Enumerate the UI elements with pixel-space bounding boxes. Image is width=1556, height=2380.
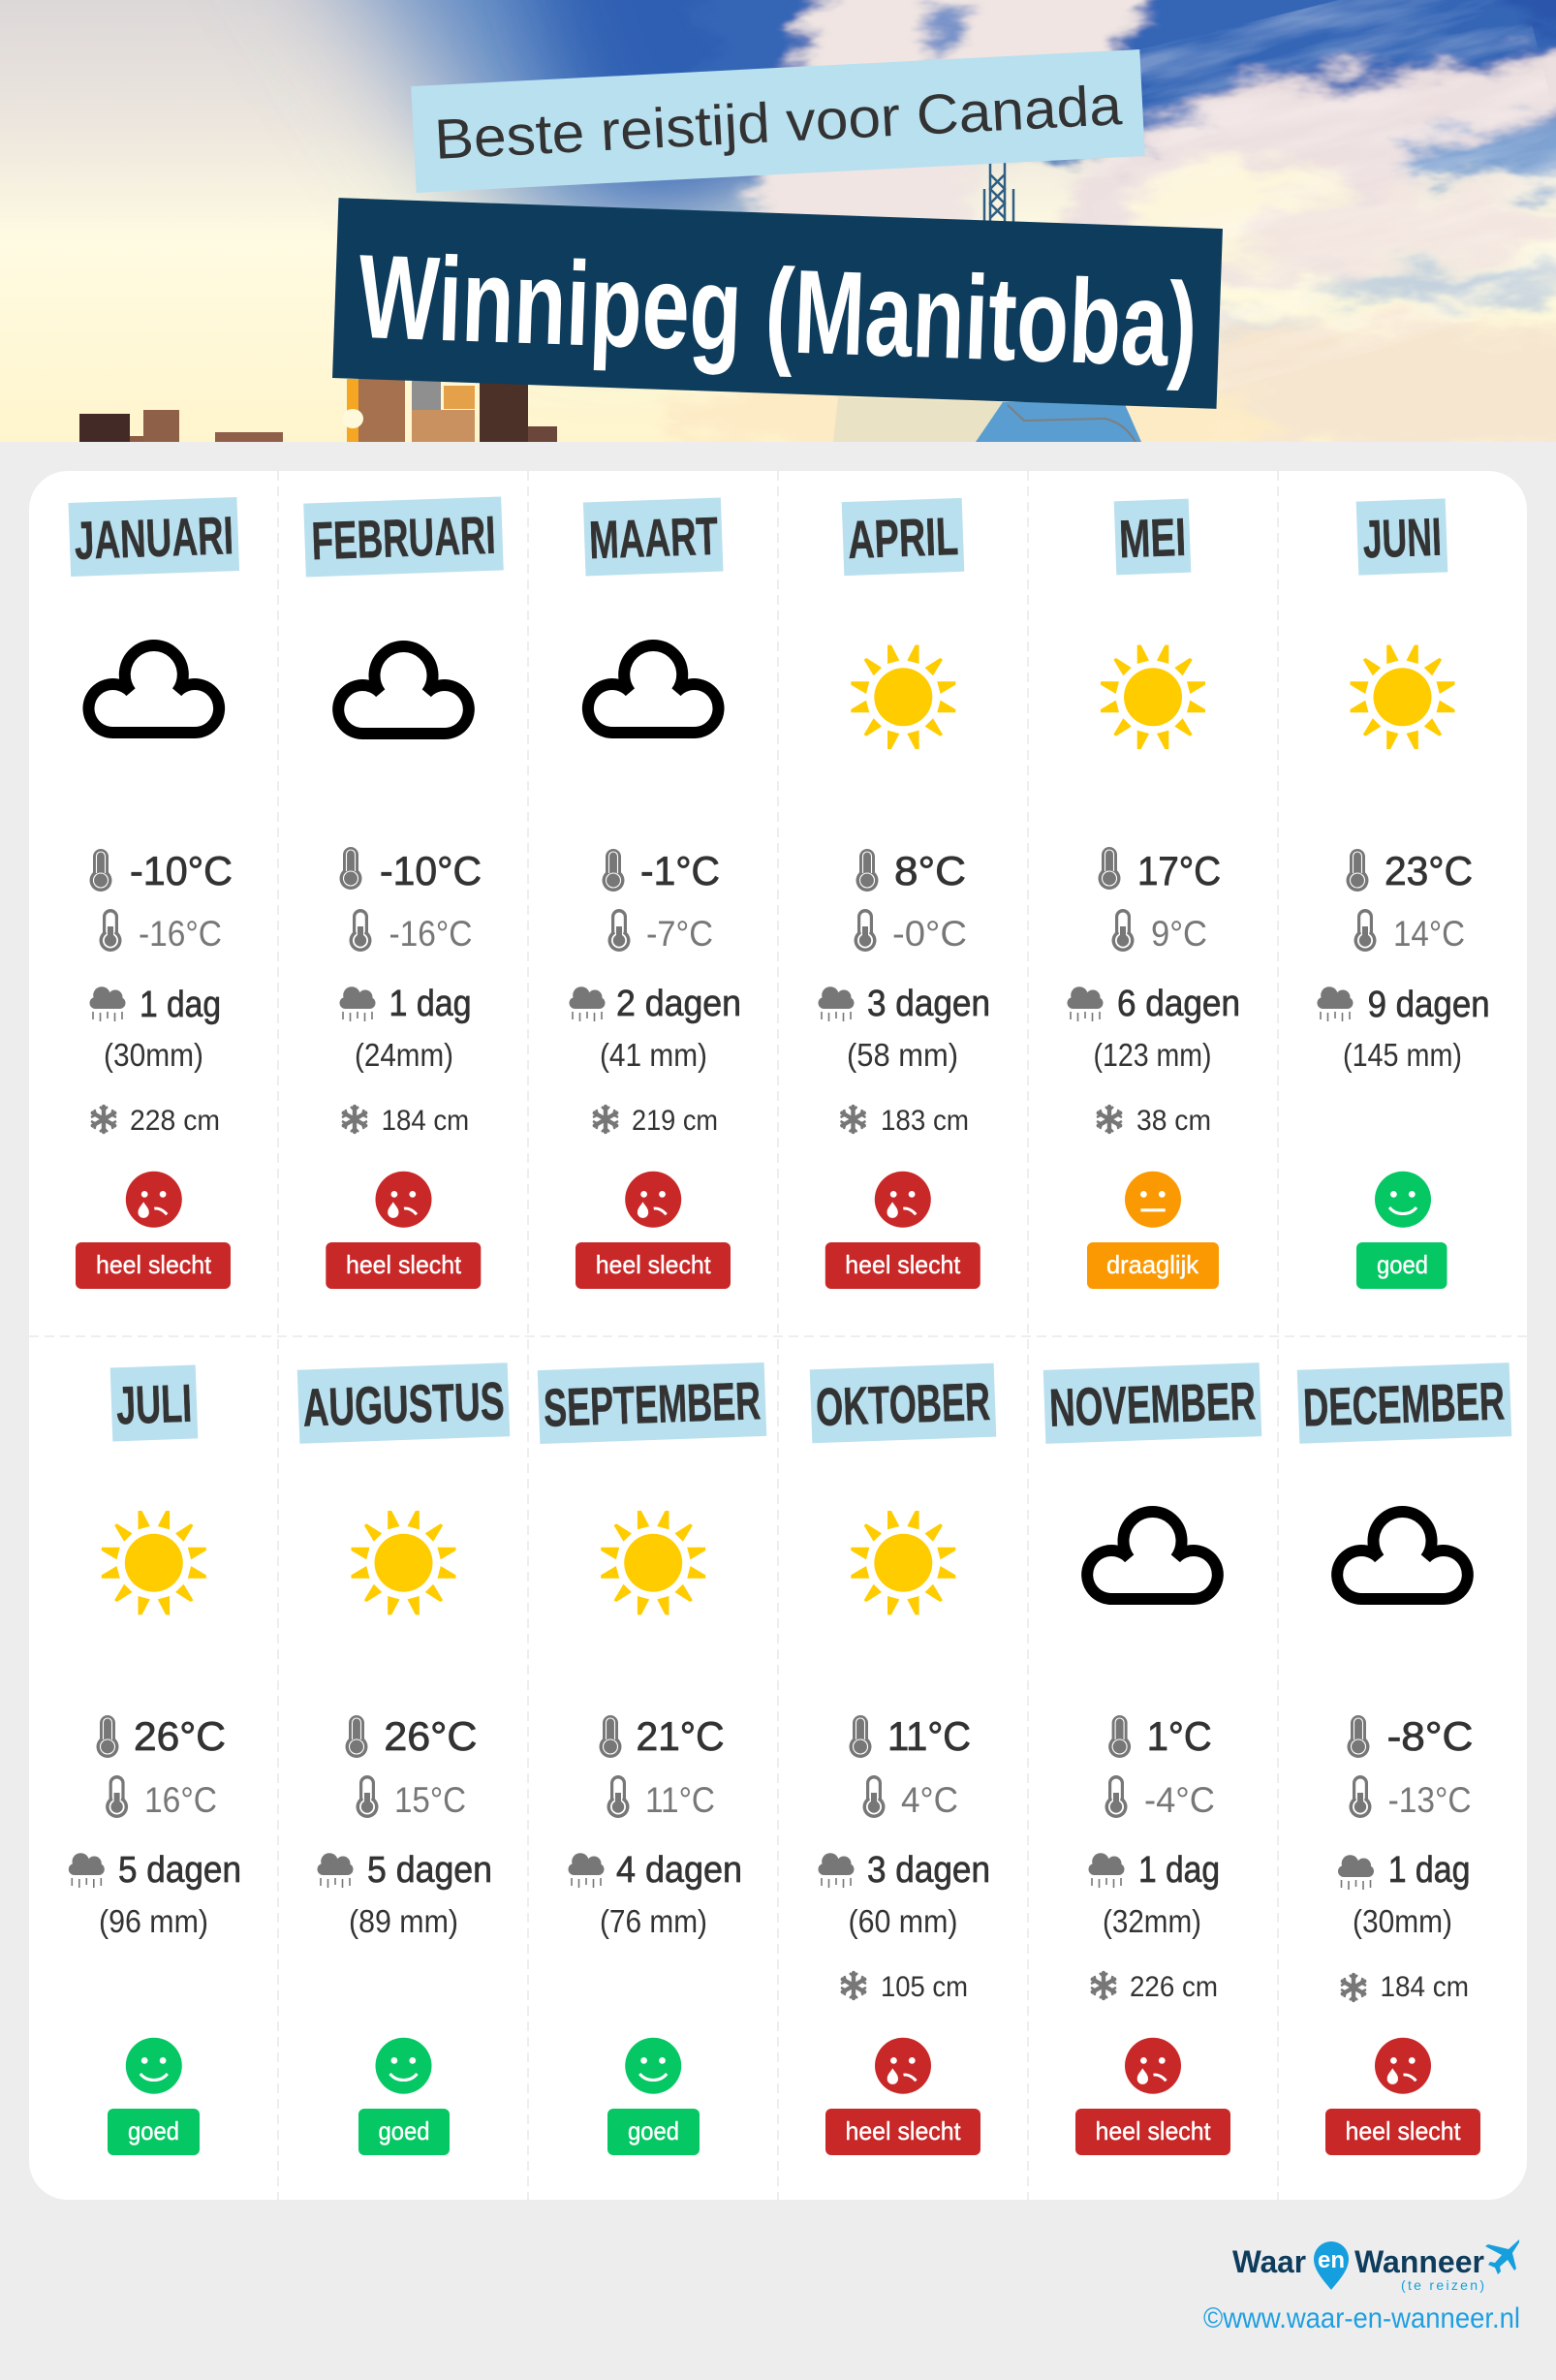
subtitle banner: Beste reistijd voor Canada	[411, 49, 1145, 193]
month label: JULI	[115, 1373, 193, 1435]
rainfall amount: (96 mm)	[99, 1903, 208, 1939]
logo: Waar en Wanneer: Wanneer	[1354, 2244, 1484, 2279]
icon: happy face	[376, 2038, 432, 2094]
icon: sad face	[376, 1172, 432, 1228]
icon: happy face	[1375, 1172, 1431, 1228]
low temperature	[357, 1775, 466, 1820]
low temperature: -16°C	[389, 914, 473, 954]
icon: sun	[1351, 645, 1455, 749]
radio tower	[984, 160, 1013, 223]
snowfall: 183 cm	[881, 1105, 969, 1137]
rainfall amount: (24mm)	[355, 1037, 453, 1073]
snowfall	[1341, 1971, 1469, 2003]
rating badge	[1075, 2109, 1230, 2155]
icon: sad face	[625, 1172, 681, 1228]
rain days: 5 dagen	[367, 1850, 492, 1891]
rating badge	[358, 2109, 450, 2155]
rain days: 4 dagen	[616, 1850, 742, 1891]
panel: november	[1043, 1362, 1261, 2155]
rating badge: heel slecht	[1095, 2116, 1211, 2145]
logo: Waar en Wanneer	[1232, 2239, 1519, 2293]
snowfall	[1097, 1105, 1211, 1137]
rain days: 1 dag	[1138, 1850, 1220, 1891]
rain days: 2 dagen	[616, 984, 741, 1024]
low temperature: -0°C	[892, 914, 967, 954]
rating badge	[1087, 1242, 1219, 1289]
icon: sun	[1101, 645, 1205, 749]
rating badge: goed	[1377, 1250, 1428, 1279]
rain days	[1089, 1850, 1220, 1891]
panel: februari	[303, 496, 504, 1289]
high temperature	[849, 1713, 971, 1759]
low temperature	[608, 909, 713, 954]
rainfall amount: (58 mm)	[847, 1037, 958, 1073]
snowfall	[342, 1105, 469, 1137]
icon: map pin: en	[1318, 2247, 1345, 2273]
rating badge: heel slecht	[346, 1250, 462, 1279]
rainfall amount: (89 mm)	[349, 1903, 458, 1939]
subtitle banner: Beste reistijd voor Canada: Beste reistijd voor Canada	[433, 74, 1124, 172]
low temperature: 11°C	[645, 1780, 715, 1820]
icon: map pin	[1314, 2241, 1349, 2290]
low temperature	[1354, 909, 1465, 954]
icon: cloud	[338, 646, 469, 734]
panel: augustus	[297, 1362, 510, 2155]
column and row dividers	[29, 471, 1527, 2200]
rain days: 1 dag	[1388, 1850, 1470, 1891]
month label	[303, 496, 504, 578]
snowfall: 184 cm	[1380, 1971, 1469, 2003]
skyline buildings	[79, 379, 1141, 442]
rating badge: heel slecht	[96, 1250, 212, 1279]
icon: sun	[601, 1511, 705, 1614]
low temperature: 4°C	[901, 1780, 958, 1820]
icon: neutral face	[1125, 1172, 1181, 1228]
rain days	[69, 1850, 241, 1891]
rating badge: heel slecht	[845, 1250, 961, 1279]
main title banner: Winnipeg (Manitoba)	[332, 198, 1223, 409]
panel: oktober	[810, 1363, 996, 2155]
rain days: 5 dagen	[118, 1850, 241, 1891]
snowfall: 226 cm	[1130, 1971, 1218, 2003]
low temperature	[1105, 1775, 1215, 1820]
month label	[842, 498, 964, 576]
month label: JUNI	[1362, 507, 1443, 569]
rating badge: heel slecht	[596, 1250, 711, 1279]
rating badge	[576, 1242, 731, 1289]
month label	[1114, 499, 1191, 575]
icon: happy face	[126, 2038, 182, 2094]
rating badge	[76, 1242, 231, 1289]
snowfall: 38 cm	[1136, 1105, 1211, 1137]
snowfall: 184 cm	[382, 1105, 469, 1137]
rain days: 3 dagen	[867, 984, 990, 1024]
month label: MEI	[1118, 507, 1187, 569]
snowfall	[593, 1105, 718, 1137]
icon: cloud	[1337, 1512, 1468, 1599]
logo: Waar en Wanneer: Waar	[1232, 2244, 1306, 2279]
low temperature: -16°C	[139, 914, 222, 954]
low temperature: 14°C	[1393, 914, 1465, 954]
high temperature: 26°C	[134, 1713, 226, 1759]
rain days: 1 dag	[140, 985, 221, 1025]
panel: september	[538, 1362, 766, 2155]
rain days: 1 dag	[389, 984, 471, 1024]
icon: cloud	[1087, 1512, 1218, 1599]
rain days	[318, 1850, 492, 1891]
high temperature	[599, 1713, 725, 1759]
icon: sun	[851, 645, 955, 749]
month label: NOVEMBER	[1048, 1370, 1257, 1438]
low temperature	[106, 1775, 217, 1820]
low temperature	[99, 909, 222, 954]
low temperature	[349, 909, 473, 954]
high temperature: 11°C	[887, 1713, 971, 1759]
snowfall: 105 cm	[881, 1971, 968, 2003]
rating badge	[1356, 1242, 1447, 1289]
high temperature	[1347, 1713, 1473, 1759]
month label	[583, 498, 723, 576]
rainfall amount: (60 mm)	[849, 1903, 957, 1939]
panel: januari	[69, 497, 239, 1289]
rating badge	[607, 2109, 700, 2155]
rainfall amount: (123 mm)	[1093, 1037, 1211, 1073]
panel: juni	[1318, 498, 1490, 1289]
snowfall: 219 cm	[632, 1105, 718, 1137]
rating badge	[326, 1242, 481, 1289]
panel: april	[818, 498, 990, 1289]
low temperature	[862, 1775, 958, 1820]
icon: sun	[351, 1511, 455, 1614]
high temperature: 21°C	[636, 1713, 725, 1759]
icon: sad face	[875, 1172, 931, 1228]
rainfall amount: (41 mm)	[600, 1037, 707, 1073]
high temperature: -1°C	[640, 848, 720, 893]
rating badge: goed	[628, 2116, 679, 2145]
month label	[810, 1363, 996, 1443]
high temperature: 23°C	[1385, 848, 1473, 893]
rainfall amount: (145 mm)	[1343, 1037, 1462, 1073]
high temperature	[1347, 848, 1473, 893]
rating badge: heel slecht	[845, 2116, 961, 2145]
month label	[69, 497, 239, 577]
month label	[297, 1362, 510, 1444]
high temperature: -10°C	[380, 848, 482, 893]
rating badge	[1325, 2109, 1480, 2155]
rainfall amount: (30mm)	[1353, 1903, 1452, 1939]
rain days	[818, 1850, 990, 1891]
low temperature	[1112, 909, 1207, 954]
rainfall amount: (30mm)	[104, 1037, 203, 1073]
rain days	[818, 984, 990, 1024]
high temperature	[603, 848, 720, 893]
rain days	[339, 984, 471, 1024]
icon: sun	[851, 1511, 955, 1614]
month label	[1356, 498, 1447, 576]
icon: sun	[102, 1511, 206, 1614]
low temperature: -7°C	[646, 914, 713, 954]
rain days	[568, 1850, 742, 1891]
low temperature	[855, 909, 967, 954]
rain days	[1068, 984, 1240, 1024]
panel: monthly climate card	[29, 471, 1527, 2200]
month label	[538, 1362, 766, 1444]
month label: JANUARI	[74, 505, 234, 571]
rating badge: heel slecht	[1345, 2116, 1461, 2145]
high temperature: 26°C	[384, 1713, 477, 1759]
rating badge: goed	[128, 2116, 179, 2145]
rain days: 6 dagen	[1117, 984, 1240, 1024]
high temperature	[1108, 1713, 1212, 1759]
rainfall amount: (32mm)	[1103, 1903, 1201, 1939]
high temperature: -10°C	[130, 848, 233, 893]
month label	[1043, 1362, 1261, 1444]
icon: cloud	[588, 645, 719, 733]
high temperature: -8°C	[1387, 1713, 1473, 1759]
month label: APRIL	[847, 506, 959, 570]
icon: sad face	[126, 1172, 182, 1228]
month label: MAART	[588, 506, 719, 570]
icon: happy face	[625, 2038, 681, 2094]
snowfall: 228 cm	[130, 1105, 220, 1137]
month label: SEPTEMBER	[543, 1370, 762, 1438]
rating badge: goed	[378, 2116, 430, 2145]
low temperature: -4°C	[1144, 1780, 1215, 1820]
rainfall amount: (76 mm)	[600, 1903, 707, 1939]
rain days	[89, 985, 221, 1025]
low temperature: 16°C	[144, 1780, 217, 1820]
low temperature: 9°C	[1151, 914, 1207, 954]
rain days	[1338, 1850, 1470, 1891]
high temperature	[345, 1713, 477, 1759]
snowfall	[1091, 1971, 1218, 2003]
low temperature	[607, 1775, 715, 1820]
low temperature	[1349, 1775, 1472, 1820]
logo: Waar en Wanneer: (te reizen)	[1401, 2277, 1484, 2293]
snowfall	[841, 1105, 969, 1137]
panel: mei	[1068, 499, 1240, 1289]
rating badge	[825, 1242, 980, 1289]
icon: sad face	[1375, 2038, 1431, 2094]
website credit: ©www.waar-en-wanneer.nl	[1203, 2302, 1520, 2334]
low temperature: -13°C	[1388, 1780, 1472, 1820]
month label: FEBRUARI	[311, 505, 497, 571]
high temperature	[1099, 847, 1221, 893]
rating badge: draaglijk	[1106, 1250, 1199, 1279]
rating badge	[825, 2109, 980, 2155]
rain days: 3 dagen	[867, 1850, 990, 1891]
panel: december	[1297, 1362, 1511, 2155]
low temperature: 15°C	[394, 1780, 466, 1820]
rain days: 9 dagen	[1368, 985, 1490, 1025]
panel: maart	[570, 498, 741, 1289]
rain days	[570, 984, 741, 1024]
high temperature	[339, 847, 482, 893]
icon: sad face	[1125, 2038, 1181, 2094]
high temperature	[856, 848, 966, 893]
header photo: Winnipeg skyline at sunset	[0, 0, 1556, 465]
high temperature: 8°C	[894, 848, 966, 893]
icon: cloud	[88, 645, 219, 733]
icon: sad face	[875, 2038, 931, 2094]
main title banner: Winnipeg (Manitoba): Winnipeg (Manitoba)	[357, 231, 1199, 392]
high temperature: 1°C	[1147, 1713, 1212, 1759]
month label: AUGUSTUS	[302, 1370, 506, 1438]
rating badge	[108, 2109, 200, 2155]
icon: airplane	[1485, 2239, 1519, 2274]
month label: OKTOBER	[815, 1371, 991, 1437]
snowfall	[91, 1105, 220, 1137]
snowfall	[841, 1971, 968, 2003]
high temperature: 17°C	[1137, 848, 1221, 893]
month label	[110, 1364, 198, 1442]
rain days	[1318, 985, 1490, 1025]
panel: juli	[69, 1364, 241, 2155]
